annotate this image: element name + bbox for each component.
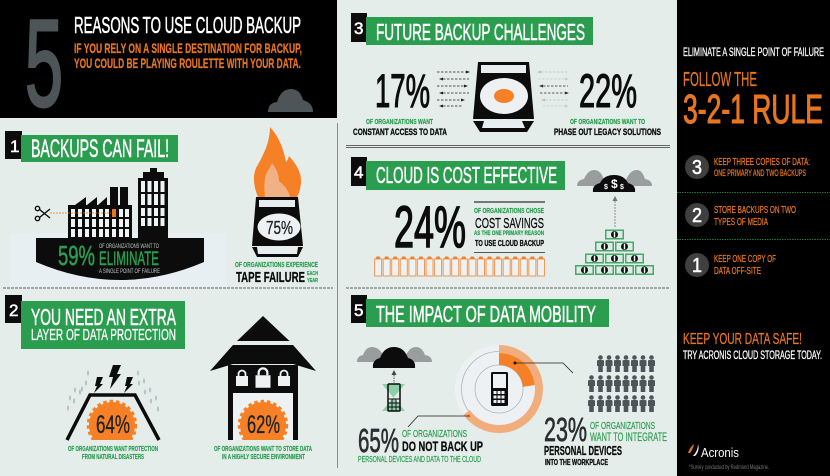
heading: LAYER OF DATA PROTECTION bbox=[31, 327, 176, 344]
heading: YOU NEED AN EXTRA bbox=[31, 304, 176, 330]
leader line: 65% bbox=[408, 414, 470, 427]
arrows: right bbox=[537, 70, 569, 108]
subtitle: YOU COULD BE PLAYING ROULETTE WITH YOUR DATA. bbox=[74, 55, 301, 71]
caption: 62%: IN A HIGHLY SECURE ENVIRONMENT bbox=[222, 454, 305, 461]
cut line bbox=[50, 212, 111, 214]
stat: 23%: 23% bbox=[544, 411, 587, 448]
stat text: cost savings: COST SAVINGS bbox=[475, 215, 544, 232]
left panel edge bbox=[337, 123, 338, 468]
icon: flame bbox=[254, 127, 301, 197]
icon: lightning bolts bbox=[94, 365, 133, 393]
arrows: left bbox=[437, 70, 470, 108]
icon: people grid bbox=[588, 355, 655, 412]
heading bbox=[366, 299, 609, 327]
heading: BACKUPS CAN FAIL! bbox=[31, 135, 169, 163]
stat: 23%: OF ORGANIZATIONS bbox=[590, 420, 655, 432]
bowl callout: 59%: ELIMINATE bbox=[99, 249, 159, 270]
heading: CLOUD IS COST EFFECTIVE bbox=[376, 162, 557, 188]
logo: Acronis: Acronis bbox=[701, 445, 739, 460]
tape row bbox=[374, 255, 545, 277]
step 2: 2 bbox=[692, 205, 702, 227]
stat: tape failure bbox=[235, 260, 318, 286]
step 1: KEEP ONE COPY OF bbox=[714, 254, 776, 265]
stat: 23%: INTO THE WORKPLACE bbox=[545, 458, 608, 467]
icon: cloud bbox=[268, 89, 313, 112]
icon: scissors bbox=[35, 206, 50, 221]
stat: 23% bbox=[544, 411, 667, 467]
caption: 64% bbox=[68, 446, 158, 461]
step 1 bbox=[685, 253, 776, 277]
title: REASONS TO USE CLOUD BACKUP bbox=[74, 12, 301, 38]
stat: 23%: PERSONAL DEVICES bbox=[544, 443, 622, 458]
stat text: cost savings: TO USE CLOUD BACKUP bbox=[475, 238, 544, 248]
stat: tape failure: TAPE FAILURE bbox=[236, 269, 305, 286]
icon: skyscraper bbox=[138, 168, 168, 238]
number badge 4 bbox=[351, 157, 367, 186]
stat: 17% bbox=[353, 64, 447, 138]
chart: donut bbox=[455, 345, 543, 433]
step 1: DATA OFF-SITE bbox=[714, 266, 761, 277]
number badge 2: 2 bbox=[9, 301, 18, 320]
stat: tape failure: EACH bbox=[307, 271, 318, 277]
number badge 3 bbox=[351, 13, 367, 42]
stat: 22% bbox=[554, 64, 661, 138]
leader line: 23% bbox=[514, 362, 573, 373]
badge: 62%: 62% bbox=[247, 411, 280, 439]
subtitle bbox=[74, 40, 302, 71]
panel: 2 extra layer bbox=[5, 295, 316, 461]
icon: tape drive bbox=[473, 62, 534, 132]
stat text: cost savings bbox=[474, 201, 545, 253]
stat: 22%: PHASE OUT LEGACY SOLUTIONS bbox=[554, 127, 661, 138]
step 3: 3 bbox=[692, 157, 702, 179]
heading: THE IMPACT OF DATA MOBILITY bbox=[376, 301, 596, 327]
icon: phone backup bbox=[382, 384, 405, 411]
badge: 64% bbox=[86, 400, 138, 440]
badge: 64%: 64% bbox=[96, 411, 130, 439]
icon: money cloud bbox=[577, 170, 652, 192]
rule heading: FOLLOW THE bbox=[683, 69, 757, 91]
call to action bbox=[683, 331, 822, 362]
icon: burning tape bbox=[252, 197, 303, 257]
bowl callout: 59%: A SINGLE POINT OF FAILURE bbox=[99, 269, 160, 275]
footnote: *Survey conducted by Redmond Magazine. bbox=[689, 464, 769, 471]
stat: 24%: 24% bbox=[394, 195, 466, 260]
pale backing bbox=[10, 233, 227, 287]
icon: burning tape: 75% bbox=[266, 218, 293, 238]
panel: 4 cost effective bbox=[351, 157, 654, 277]
icon: money cloud: $ bbox=[604, 184, 608, 191]
logo: Acronis bbox=[688, 444, 739, 460]
stat: 65%: 65% bbox=[358, 422, 399, 459]
number badge 1 bbox=[5, 131, 22, 159]
stat text: cost savings: AS THE ONE PRIMARY REASON bbox=[474, 231, 544, 237]
number badge 3: 3 bbox=[354, 19, 363, 38]
stat: 65%: DO NOT BACK UP bbox=[402, 439, 483, 454]
panel: 1 backups can fail bbox=[5, 127, 318, 287]
icon: phone bbox=[491, 372, 508, 406]
bowl callout: 59%: 59% bbox=[58, 240, 95, 271]
panel: header bbox=[0, 0, 337, 133]
icon: clouds bbox=[357, 347, 432, 368]
step 2: TYPES OF MEDIA bbox=[714, 217, 768, 228]
step 1: 1 bbox=[692, 255, 702, 277]
number badge 5: 5 bbox=[354, 301, 363, 320]
number badge 5 bbox=[351, 295, 367, 323]
caption: 62% bbox=[214, 446, 312, 461]
icon: money cloud: $ bbox=[620, 184, 624, 191]
stat: 65%: OF ORGANIZATIONS bbox=[402, 428, 467, 440]
icon: money cloud: $ bbox=[611, 177, 618, 191]
caption: 64%: OF ORGANIZATIONS WANT PROTECTION bbox=[68, 446, 158, 453]
icon: secure house bbox=[210, 316, 316, 440]
icon: money pyramid bbox=[575, 230, 654, 275]
heading bbox=[21, 135, 178, 163]
icon: shelter roof bbox=[67, 395, 159, 440]
number badge 4: 4 bbox=[354, 163, 363, 182]
stat: 17%: OF ORGANIZATIONS WANT bbox=[366, 119, 434, 126]
arrow: money to cloud bbox=[612, 196, 618, 228]
step 3 bbox=[685, 155, 810, 179]
bowl callout: 59% bbox=[36, 238, 204, 280]
heading: FUTURE BACKUP CHALLENGES bbox=[376, 19, 585, 45]
stat: 65%: PERSONAL DEVICES AND DATA TO THE CLOUD bbox=[358, 455, 481, 464]
big numeral 5: 5 bbox=[25, 0, 63, 133]
heading bbox=[366, 17, 593, 45]
stat: 17%: CONSTANT ACCESS TO DATA bbox=[353, 127, 447, 138]
caption: 62%: OF ORGANIZATIONS WANT TO STORE DATA bbox=[214, 446, 312, 453]
number badge 2 bbox=[5, 295, 22, 323]
stat: 22%: OF ORGANIZATIONS WANT TO bbox=[570, 119, 645, 126]
subtitle: IF YOU RELY ON A SINGLE DESTINATION FOR BACKUP, bbox=[74, 40, 302, 56]
stat: 22%: 22% bbox=[579, 64, 637, 117]
badge: 62% bbox=[238, 400, 288, 440]
icon: storm rain bbox=[67, 370, 159, 412]
icon: factory bbox=[68, 187, 132, 239]
bowl callout: 59%: OF ORGANIZATIONS WANT TO bbox=[99, 244, 159, 250]
heading bbox=[366, 161, 565, 190]
stat: tape failure: OF ORGANIZATIONS EXPERIENCE bbox=[235, 260, 318, 269]
step 2 bbox=[685, 203, 796, 228]
stat: 23%: WANT TO INTEGRATE bbox=[590, 432, 667, 444]
arrow: phone to cloud bbox=[392, 370, 396, 383]
caption: 64%: FROM NATURAL DISASTERS bbox=[82, 454, 144, 461]
stat: 17%: 17% bbox=[375, 64, 430, 117]
heading bbox=[21, 301, 185, 349]
stat: 65% bbox=[358, 422, 483, 464]
stat: tape failure: YEAR bbox=[307, 278, 318, 284]
stat text: cost savings: OF ORGANIZATIONS CHOSE bbox=[474, 208, 544, 215]
panel: 3 future challenges bbox=[351, 13, 661, 138]
panel: right column bbox=[677, 0, 830, 476]
number badge 1: 1 bbox=[10, 137, 19, 156]
panel: 5 data mobility bbox=[351, 295, 667, 467]
